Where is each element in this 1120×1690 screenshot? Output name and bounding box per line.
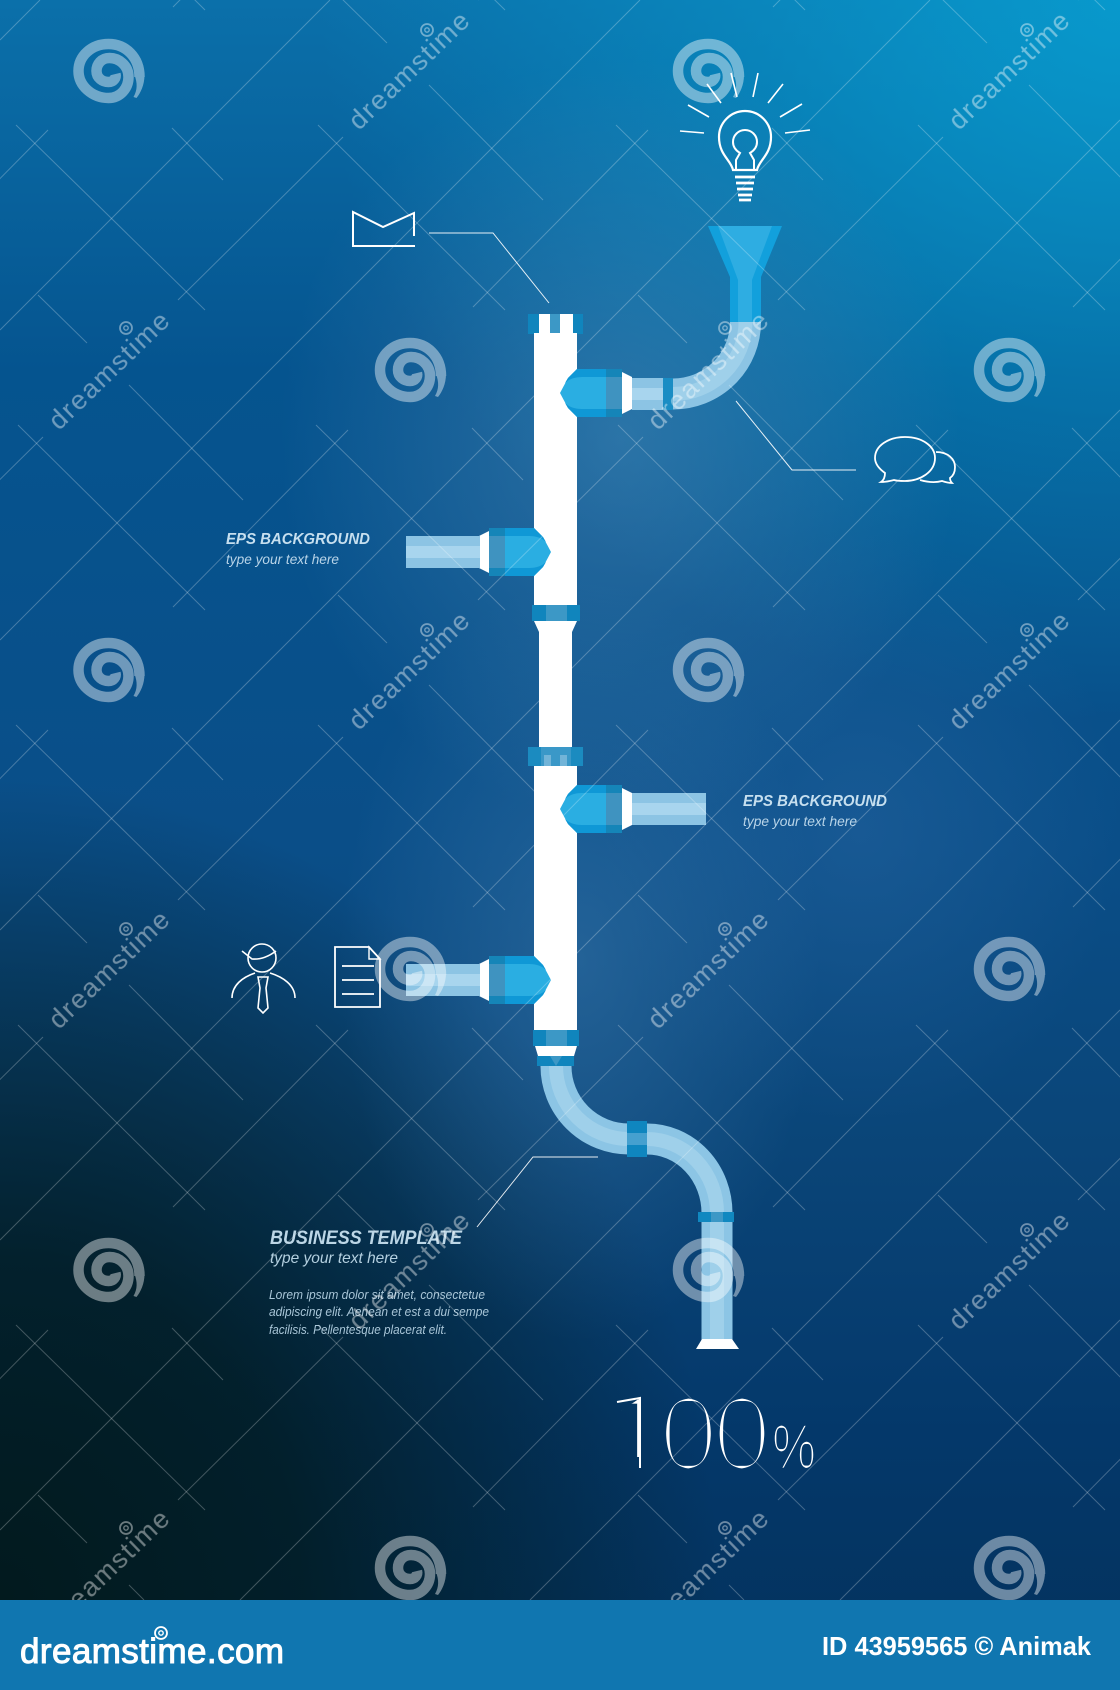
watermark wordmarks: dreamstime — [942, 606, 1075, 735]
pipe outlet — [696, 1339, 739, 1349]
body copy: facilisis. Pellentesque placerat elit. — [269, 1323, 447, 1337]
coupling band 6 — [698, 1212, 734, 1222]
text: EPS background right: type your text here — [743, 813, 857, 829]
footer bar — [0, 1600, 1120, 1690]
text: business template: type your text here — [270, 1250, 398, 1267]
icon: light bulb — [680, 73, 810, 200]
main vertical pipe — [528, 314, 583, 1056]
watermark small marks — [120, 24, 1033, 1534]
watermark wordmarks: dreamstime — [342, 1206, 475, 1335]
coupling band 1 — [532, 605, 580, 621]
lower S-curve pipe — [537, 1056, 739, 1349]
icon: document — [335, 947, 380, 1007]
footer image id: ID 43959565 © Animak — [822, 1631, 1092, 1661]
watermark wordmarks: dreamstime — [942, 1206, 1075, 1335]
text: EPS background right: EPS BACKGROUND — [743, 793, 887, 810]
coupling band 3 — [533, 1030, 579, 1046]
watermark wordmarks: dreamstime — [42, 306, 175, 435]
icon: envelope — [353, 212, 415, 246]
footer logo: dreamstime.com — [20, 1632, 284, 1671]
big 100 percent figure — [616, 1396, 814, 1468]
coupling band 4 — [537, 1056, 574, 1066]
watermark wordmarks: dreamstime — [342, 606, 475, 735]
icon: businessman — [232, 944, 295, 1013]
big 100 percent figure: % — [772, 1413, 816, 1482]
text: EPS background left: EPS BACKGROUND — [226, 531, 370, 548]
text: business template — [269, 1227, 489, 1337]
watermark wordmarks: dreamstime — [641, 1504, 774, 1633]
leader line: envelope — [429, 233, 549, 303]
text: EPS background left: type your text here — [226, 551, 339, 567]
watermark wordmarks: dreamstime — [42, 905, 175, 1034]
pipe top cap — [528, 314, 583, 334]
elbow outlet: lower left — [406, 956, 551, 1004]
body copy — [269, 1288, 489, 1337]
coupling band 5 — [627, 1121, 647, 1157]
watermark wordmarks: dreamstime — [42, 1504, 175, 1633]
elbow outlet: upper left — [406, 528, 551, 576]
coupling band 2 — [528, 747, 583, 766]
text: business template: BUSINESS TEMPLATE — [270, 1227, 463, 1249]
text: EPS background left — [226, 531, 370, 567]
elbow outlet: right — [560, 785, 706, 833]
watermark wordmarks: dreamstime — [641, 905, 774, 1034]
top outlet: funnel and curved pipe — [632, 226, 782, 410]
watermark wordmarks: dreamstime — [342, 6, 475, 135]
funnel — [708, 226, 782, 324]
leader line: business template — [477, 1157, 598, 1227]
text: EPS background right — [743, 793, 887, 829]
leader line: speech — [736, 401, 856, 470]
body copy: adipiscing elit. Aenean et est a dui sempe — [269, 1305, 489, 1319]
body copy: Lorem ipsum dolor sit amet, consectetue — [269, 1288, 485, 1302]
watermark wordmarks: dreamstime — [641, 306, 774, 435]
elbow joint: top right — [560, 369, 632, 417]
watermark wordmarks: dreamstime — [942, 6, 1075, 135]
icon: speech bubbles — [875, 437, 955, 483]
big 100 percent figure: 100 — [608, 1375, 771, 1493]
